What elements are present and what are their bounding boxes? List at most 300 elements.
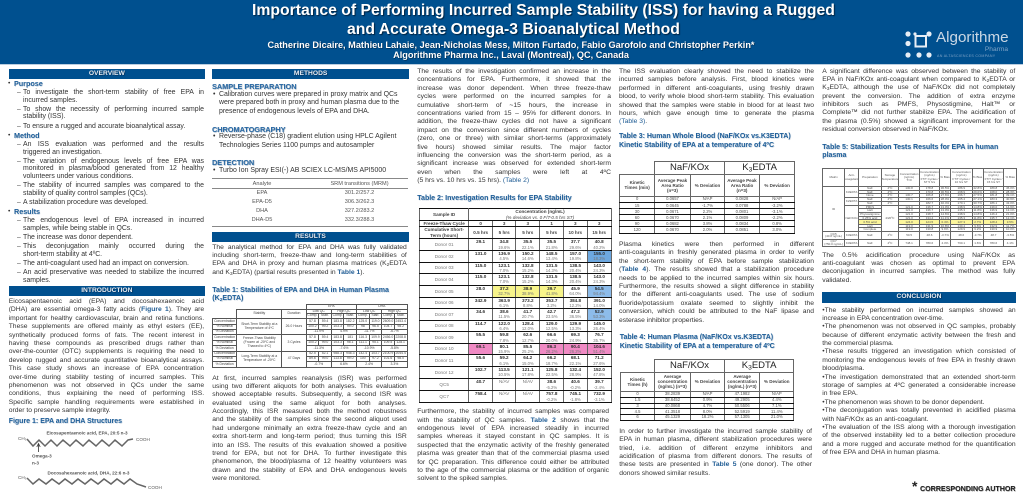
table 5: FT/T Cycles /: [921, 177, 938, 181]
table 2: 35.7%: [593, 338, 605, 343]
stabilization procedures text: EPA in human plasma, different stabilization procedures were: [619, 436, 812, 443]
anti-coagulant difference text: Complete™ did not further stabilize EPA. The acidification of: [822, 109, 1015, 116]
detection: Turbo Ion Spray ESI(-) AB SCIEX LC-MS/MS API5000: [219, 167, 386, 174]
table 2: 37.7: [571, 239, 580, 244]
title: and Accurate Omega-3 Bioanalytical Method: [347, 21, 680, 38]
results discussion text: had undergone minimally an extra freeze-thaw cycle and an: [212, 425, 407, 432]
table 2: 3: [574, 221, 577, 226]
results discussion text: Accordingly, this ISR measured both the method robustness: [212, 408, 407, 415]
table 2: 38.9: [523, 286, 532, 291]
table 2: 7.8%: [499, 338, 509, 343]
QC comparison text: suspected that the enzymatic activity of the freshly generated: [417, 442, 609, 449]
table 5: 760.1: [958, 240, 965, 244]
panel: overview bullets: The anti-coagulant used had an impact on conversion.: [23, 260, 189, 267]
table 4 heading: Kinetic Stability of EPA at a temperature of 4ºC: [620, 343, 775, 350]
table 3: N/AP: [703, 196, 712, 201]
table 2: 64.0%: [569, 291, 581, 296]
table 2: 26.4%: [593, 326, 605, 331]
table 3: 2.1%: [703, 215, 712, 220]
conclusion text: with NaF/KOx as an anti-coagulant.: [822, 416, 928, 423]
QC comparison text: to the age of the commercial plasma or the addition of organic: [417, 467, 609, 474]
table 4: NaF/KOx: [670, 360, 709, 371]
anti-coagulant difference text: inhibitors such as PMFS, Physostigmine, Halt™ or: [822, 101, 1015, 108]
introduction text: having these compounds as prescribed drugs rather than: [9, 340, 204, 347]
panel: overview bullets: –: [17, 243, 21, 250]
table 2: 14.0%: [593, 303, 605, 308]
table 1: 3 Cycles: [287, 340, 300, 344]
table 1: Thawed to 4ºC): [248, 344, 271, 348]
figure 1: EPA and DHA chemical structures: Omega-3: [32, 454, 52, 458]
stabilization procedures text: donors showed similar results.: [619, 470, 710, 477]
table 4 heading: [620, 334, 776, 350]
panel: overview bullets: A stabilization procedure was developed.: [23, 199, 148, 206]
table 2: 15.2%: [522, 268, 534, 273]
table 5: 780.6: [926, 240, 933, 244]
QC comparison text: for QC preparation. This difference could either be attributed: [417, 459, 609, 466]
table 1: Freeze-Thaw Stability: [243, 336, 276, 340]
table 2: 732.9: [593, 391, 605, 396]
panel: overview bullets: –: [17, 182, 21, 189]
table 2: 132.8: [522, 263, 534, 268]
table 2: 13.3%: [569, 326, 581, 331]
results text: including short-term, freeze-thaw and long-term stabilities of: [212, 252, 407, 259]
panel: overview bullets: incurred samples.: [23, 97, 77, 104]
investigation text: cumulative short-term of ~15 hours, the increase in: [417, 102, 611, 109]
table 2: 54.5: [595, 286, 604, 291]
corresponding author note: CORRESPONDING AUTHOR: [920, 484, 1016, 492]
table 2: 12.0%: [522, 326, 534, 331]
table 5: 4ºC: [887, 233, 892, 237]
introduction text: (DHA) are essential omega-3 fatty acids (Figure 1). They are: [9, 306, 204, 313]
panel: overview bullets: –: [17, 123, 21, 130]
table 2: 59.8: [500, 332, 509, 337]
panel: overview bullets: stability (ISS).: [23, 113, 66, 120]
table 2: 342.9: [475, 298, 486, 303]
ISS stabilization text: showed that the samples were stable in blood for at least two: [619, 102, 814, 109]
table 2: -0.2%: [570, 385, 581, 390]
table 4: concentration: [658, 379, 687, 384]
stabilization procedures text: these tests are presented in Table 5 (one donor). The other: [619, 461, 812, 468]
table 1: Long-Term Stability at a: [241, 354, 277, 358]
table 2: 11.5%: [498, 314, 510, 319]
table 5: 10 hrs ST: [955, 180, 968, 184]
table 2: 125.8: [546, 367, 557, 372]
table 2: 132.8: [522, 274, 534, 279]
panel: overview bullets: volunteers under various conditions.: [23, 173, 133, 180]
table 2: 53.3%: [593, 314, 605, 319]
table 5: (40.0 ng/mL): [825, 234, 842, 238]
table 3: K3EDTA: [742, 162, 777, 173]
table 2: 40.7: [476, 379, 485, 384]
plasma kinetics text: [619, 241, 814, 324]
table 5: (ng/mL): [956, 173, 966, 177]
table 2: 38.6: [500, 309, 509, 314]
results discussion text: using two different aliquots for both analyses. This evaluation: [212, 383, 407, 390]
table 2: 3: [598, 221, 600, 226]
table 2: QC5: [439, 382, 449, 387]
figure 1: EPA and DHA chemical structures: CH₃: [18, 475, 27, 480]
table 2: 8.8%: [523, 303, 533, 308]
panel: overview bullets: monitored in plasma/blood generated from 12 healthy: [23, 165, 204, 172]
panel: overview bullets: The variation of endogenous levels of free EPA was: [23, 158, 204, 165]
stabilization procedures text: [619, 428, 812, 477]
figure 1: EPA and DHA chemical structures: [18, 430, 162, 490]
table 5: Concentration: [952, 170, 971, 174]
table 3: 0.0682: [666, 221, 679, 226]
table 3: 15: [635, 203, 639, 208]
table 2: Donor 03: [435, 265, 454, 270]
table 2: 122.0: [498, 321, 510, 326]
table 3: Average Peak: [658, 178, 687, 183]
table 5: FT/T Cycles /: [985, 177, 1002, 181]
table 2: Donor 10: [435, 346, 454, 351]
QC comparison text: plasma was greater than that of the commercial plasma used: [417, 450, 609, 457]
authors and affiliation: [267, 40, 756, 61]
table 5: coagulant: [845, 177, 858, 181]
table 5: Concentration: [920, 170, 939, 174]
table 2: Donor 08: [435, 323, 454, 328]
panel: overview bullets: –: [17, 199, 21, 206]
panel: overview bullets: –: [17, 106, 21, 113]
conclusion text: •The phenomenon was not observed in QC samples, probably: [822, 323, 1016, 330]
table 1: Stability: [253, 311, 265, 315]
table 2: 12.7%: [522, 338, 534, 343]
analyte table: EPA-D5: [252, 199, 272, 205]
table 2: 24.3%: [593, 268, 605, 273]
table 5: T=0: [906, 178, 912, 182]
table 3: Average Peak: [727, 178, 757, 183]
table 5: Concentration: [900, 172, 918, 176]
table 5: -3.7%: [941, 233, 949, 237]
sample preparation: were prepared both in proxy and human plasma due to the: [219, 99, 399, 106]
corresponding author note: *: [912, 478, 917, 494]
table 2: 17.8%: [522, 372, 534, 377]
table 3: 0: [636, 196, 638, 201]
table 5: 50.5: [906, 233, 912, 237]
conclusion text: •The investigation demonstrated that an extended short-term: [822, 374, 1016, 381]
table 2: 104.6: [593, 344, 605, 349]
table 3 heading: [619, 132, 791, 150]
introduction text: phenomenon was not observed in QCs under the same: [9, 382, 204, 389]
table 2: 373.2: [522, 298, 534, 303]
table 2: 5 hrs: [546, 230, 557, 235]
chromatography: [212, 124, 396, 149]
table 5: K3EDTA: [846, 190, 857, 194]
sample preparation: [212, 82, 399, 115]
table 2: 22.1%: [522, 244, 534, 250]
table 2: 62.6: [523, 332, 532, 337]
sample preparation: •: [213, 91, 215, 98]
table 2: -5.2%: [546, 385, 557, 390]
table 2: 102.7: [475, 367, 486, 372]
title: [252, 2, 836, 39]
table 2: 0.5 hrs: [473, 230, 488, 235]
investigation text: impact on the conversion since different numbers of cycles: [417, 127, 611, 134]
introduction text: over-the-counter (OTC) supplements is requiring the need to: [9, 348, 204, 355]
conclusion text: blood/plasma.: [822, 365, 864, 372]
table 2: 6.1%: [499, 361, 509, 366]
table 2: 24.9%: [569, 338, 581, 343]
table 2: 115.0: [475, 263, 486, 268]
table 5: 4/20ºC: [885, 216, 894, 220]
table 2: 14.3%: [546, 279, 558, 284]
introduction text: This case study shows an increase of EPA concentration: [9, 365, 204, 372]
table 3: 0.0670: [666, 215, 679, 220]
table 5: (ng/mL): [904, 175, 914, 179]
table 5: 4.1%: [1007, 240, 1014, 244]
table 2: 27.6%: [593, 361, 605, 366]
table 1 heading: (K2EDTA): [212, 295, 243, 303]
table 2: N/AV: [499, 391, 509, 396]
table 1: Temperature of -20ºC: [243, 358, 275, 362]
panel: overview bullets: Results: [14, 207, 40, 216]
table 3: 2.2%: [703, 209, 712, 214]
table 5: 4ºC: [887, 240, 892, 244]
table 2: 4.5%: [499, 256, 509, 261]
investigation text: [417, 68, 611, 184]
table 2: Donor 12: [435, 370, 454, 375]
table 2: 28.0: [476, 286, 485, 291]
table 5: Concentration: [984, 170, 1003, 174]
table 4: (ng/mL) (n=3): [728, 384, 756, 389]
results discussion text: evaluated using the same aliquot for both analyses.: [212, 400, 407, 407]
anti-coagulant difference text: [822, 68, 1016, 133]
panel: overview bullets: To investigate the short-term stability of free EPA in: [23, 89, 204, 96]
table 2: 12.2%: [569, 303, 581, 308]
table 2: 36.5%: [569, 314, 581, 319]
table 5 heading: Table 5: Stabilization Tests Results for EPA in human plasma: [822, 144, 998, 159]
figure 1: EPA and DHA chemical structures: Docosahexaenoic acid, DHA, 22:6 n-3: [48, 471, 130, 476]
investigation text: The results of the investigation confirmed an increase in the: [417, 68, 611, 75]
results discussion text: trend for EPA, but not for DHA. To further investigate this: [212, 450, 407, 457]
table 2: -2.4%: [594, 385, 605, 390]
table 2: 1: [550, 221, 553, 226]
table 2: 35.5: [547, 239, 556, 244]
table 5: % Bias: [1006, 175, 1015, 179]
detection: [212, 158, 386, 174]
introduction text: over-time during stability testing of incurred samples. This: [9, 374, 204, 381]
QC comparison text: with the stability of QC samples. Table 2 shows that the: [417, 417, 609, 424]
plasma kinetics text: conversion, which could be attributed to the NaF lipase and: [619, 308, 814, 315]
table 2: 123.1: [498, 263, 510, 268]
table 3: 0.0645: [666, 203, 679, 208]
conclusion text: •The phenomenon was shown to be donor dependent.: [822, 399, 985, 406]
anti-coagulant difference text: residual conversion observed in NaF/KOx.: [822, 126, 949, 133]
table 2: 113.5: [498, 367, 510, 372]
table 3: 30: [635, 209, 639, 214]
introduction text: conditions, thus explaining the need of performing ISS.: [9, 390, 204, 397]
table 3: 2.0%: [703, 227, 712, 232]
table 3: 0.0671: [666, 209, 679, 214]
table 3: 90: [635, 221, 639, 226]
panel: overview bullets: An ISS evaluation was performed and the results: [23, 141, 204, 148]
table 5: K2EDTA: [846, 199, 857, 203]
table 2: 363.9: [498, 298, 510, 303]
chromatography: Technologies Series 1100 pumps and autosampler: [219, 142, 374, 149]
table 2: 15 hrs: [592, 230, 606, 235]
investigation text: (5 hrs vs. 10 hrs vs. 15 hrs). (Table 2): [417, 177, 529, 184]
table 2: 47.8%: [593, 372, 605, 377]
table 3: Area Ratio: [661, 183, 684, 188]
table 5: (750.0 ng/mL): [824, 242, 843, 246]
table 2: N/AV: [523, 379, 533, 384]
plasma kinetics text: for the different anti-coagulants used. The use of sodium: [619, 291, 814, 298]
table 1: Temperature of 4ºC: [245, 326, 274, 330]
table 2: 21.8%: [546, 244, 558, 250]
panel: overview bullets: To ensure a rugged and accurate bioanalytical assay.: [23, 123, 185, 130]
table 2: 40.8: [595, 239, 604, 244]
table 2: (% deviation vs. 0 F/T-0.5 hrs ST): [506, 214, 574, 220]
anti-coagulant difference text: EPA in NaF/KOx anti-coagulant when compared to K2EDTA or: [822, 76, 1015, 84]
results text: EPA and DHA in proxy and human plasma matrices (K2EDTA: [212, 260, 407, 268]
table 2: Donor 05: [435, 289, 454, 294]
conclusion text: •The stability performed on incurred samples showed an: [822, 306, 1016, 314]
investigation text: significant increase was observed for extended short-term: [417, 160, 611, 167]
table 5: 48.7: [991, 233, 996, 237]
table 2: 14.3%: [546, 268, 558, 273]
table 2: Term (hours): [430, 233, 458, 238]
panel: overview bullets: triggered an investigation.: [23, 149, 102, 156]
authors and affiliation: Catherine Dicaire, Mathieu Lahaie, Jean-Nicholas Mess, Milton Furtado, Fabio Garofolo and Christopher Perkin*: [267, 40, 755, 50]
panel: overview bullets: Method: [14, 131, 40, 140]
table 2: N/AV: [499, 379, 509, 384]
table 2: 18.3%: [593, 256, 605, 261]
analyte table: EPA: [257, 190, 267, 196]
analyte table: [212, 178, 408, 227]
figure 1: EPA and DHA chemical structures: Eicosapentaenoic acid, EPA, 20:5 n-3: [46, 430, 128, 436]
table 3: % Deviation: [695, 183, 720, 188]
table 2: 129.9: [570, 321, 581, 326]
table 2: 114.7: [475, 321, 486, 326]
table 3: -1.7%: [702, 203, 713, 208]
table 4: (ng/mL) (n=3): [658, 384, 687, 389]
table 2: 5 hrs: [499, 230, 510, 235]
table 5: NaF: [867, 233, 873, 237]
panel: overview bullets: –: [17, 158, 21, 165]
plasma kinetics text: (Table 4). The results showed that a stabilization procedure: [619, 266, 814, 273]
table 2: Donor 09: [435, 335, 454, 340]
table 3: (n=3): [667, 188, 678, 193]
results discussion text: extra short-term and long-term period; thus turning this ISR: [212, 433, 407, 440]
table 2: 29.6%: [569, 244, 581, 250]
table 3: 0.0809: [736, 215, 748, 220]
anti-coagulant difference text: A significant difference was observed between the stability of: [822, 68, 1015, 74]
table 2: 6.4%: [499, 326, 509, 331]
plasma kinetics text: needs to be applied to the incurred samples within six hours.: [619, 275, 814, 282]
anti-coagulant difference text: the plasma (0.5%) showed a significant improvement for the: [822, 118, 1015, 125]
table 2: 40.2%: [593, 244, 605, 250]
table 4: Average: [733, 374, 751, 379]
anti-coagulant difference text: prevent the conversion. The addition of extra enzyme: [822, 93, 1015, 100]
panel: methods heading: [212, 69, 409, 79]
table 2: 7.0%: [499, 268, 509, 273]
investigation text: cycles were performed on the incurred samples for a: [417, 93, 611, 100]
table 5: FT/T Cycles /: [952, 177, 970, 181]
table 2: 131.5: [546, 263, 557, 268]
table 3: Times (min): [625, 185, 650, 190]
conclusion text: and a more rugged and accurate method for the quantification: [822, 441, 1016, 448]
table 2: 37.2: [500, 286, 509, 291]
table 5: -3.5%: [1006, 233, 1014, 237]
figure 1: EPA and DHA chemical structures: COOH: [136, 437, 150, 442]
table 1 heading: [212, 286, 390, 303]
table 2: 85.5: [523, 344, 532, 349]
detection: •: [213, 167, 215, 174]
table 2: 19.6%: [498, 244, 510, 250]
plasma kinetics text: the short-term stability of EPA before sample stabilization: [619, 258, 814, 265]
table 2: 18.7%: [546, 361, 558, 366]
table 2: 10 hrs: [569, 230, 582, 235]
panel: overview bullets: –: [17, 89, 21, 96]
panel: overview bullets: stability of quality control samples (QCs).: [23, 190, 148, 197]
table 4: concentration: [727, 379, 757, 384]
table 3: 0.8%: [772, 221, 782, 226]
table 2: 121.1: [522, 367, 534, 372]
conclusion text: in free EPA.: [822, 390, 858, 397]
methods text and analyte table: [212, 82, 408, 227]
table 2: 59.2: [500, 355, 509, 360]
panel: overview bullets: [8, 79, 204, 284]
table 2: 39.7: [547, 286, 556, 291]
table 2: 3: [503, 221, 505, 226]
acidification text: deconjugation in incurred samples. The method was fully: [822, 268, 1015, 275]
table 2: 131.5: [546, 274, 557, 279]
results discussion text: drawn and the stability of EPA and DHA endogenous levels: [212, 467, 407, 474]
table 2: 150.2: [522, 251, 534, 256]
figure 1: EPA and DHA chemical structures: n-3: [32, 460, 39, 466]
authors and affiliation: Algorithme Pharma Inc., Laval (Montreal), QC, Canada: [393, 50, 629, 60]
table 3: 0.0801: [736, 209, 748, 214]
table 2: 68.1: [571, 355, 580, 360]
analyte table: Analyte: [253, 181, 271, 187]
table 3: -3.2%: [772, 203, 783, 208]
ISS stabilization text: [619, 68, 814, 125]
table 3: 3.0%: [772, 227, 782, 232]
table 2: 35.5: [523, 239, 532, 244]
stabilization procedures text: acidification of plasma from different donors. The results of: [619, 453, 812, 460]
introduction text: synthetically produced forms of fats. The recent interest in: [9, 332, 204, 339]
table 2: Donor 06: [435, 300, 454, 305]
table 2: Donor 02: [435, 254, 454, 259]
figure 1 heading: Figure 1: EPA and DHA Structures: [9, 418, 122, 425]
results text: The analytical method for EPA and DHA was fully validated: [212, 244, 407, 250]
stabilization procedures text: tried, i.e. addition of different enzyme inhibitors and: [619, 445, 812, 452]
table 5: (ng/mL): [988, 173, 999, 177]
table 5: 1.6%: [974, 240, 981, 244]
table 2: 384.8: [570, 298, 581, 303]
table 2: 128.4: [522, 321, 534, 326]
table 3: Area Ratio: [731, 183, 753, 188]
table 2: 25.2%: [522, 349, 534, 354]
table 5: K3EDTA: [846, 233, 857, 237]
panel: overview bullets: Purpose: [14, 79, 43, 88]
table 2: 41.7: [523, 309, 532, 314]
table 3: (n=3): [737, 188, 747, 193]
table 3: 0.0834: [736, 221, 748, 226]
investigation text: even when the samples were left at 4ºC: [417, 169, 611, 176]
table 2: Donor 04: [435, 277, 454, 282]
table 2: 26.2%: [569, 349, 581, 354]
table 2: 132.4: [570, 367, 581, 372]
table 3: NaF/KOx: [670, 162, 709, 173]
conclusion text: of free EPA and DHA in human plasma.: [822, 449, 940, 456]
table 2: 353.7: [546, 298, 557, 303]
introduction text: [8, 298, 204, 414]
table 2: 115.0: [475, 274, 486, 279]
plasma kinetics text: Furthermore, the results showed a slight difference in stability: [619, 283, 814, 290]
table 4: Times (h): [628, 382, 647, 387]
table 2: 40.6: [571, 379, 580, 384]
